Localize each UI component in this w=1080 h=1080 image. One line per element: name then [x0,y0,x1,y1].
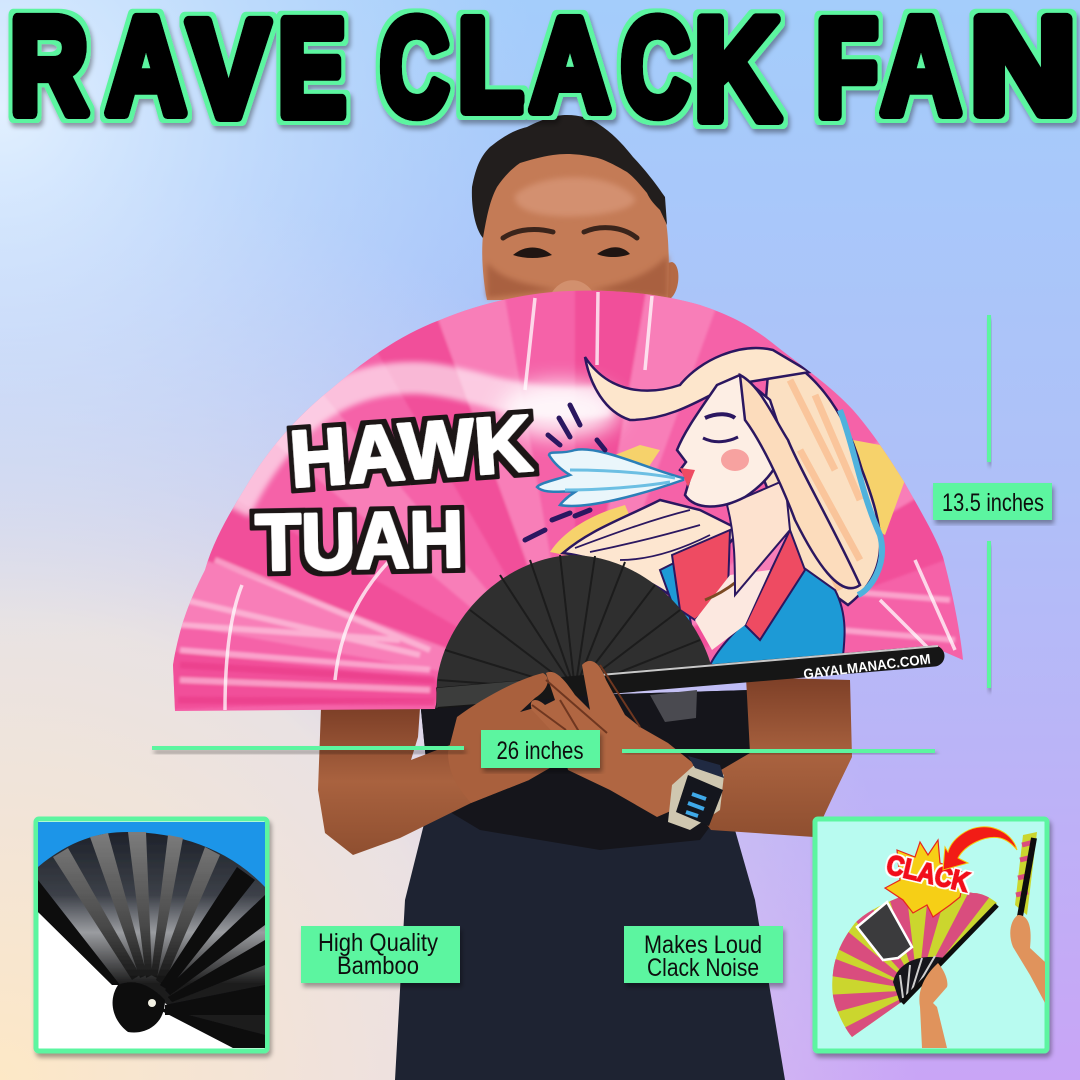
black slats [38,867,265,1048]
fabric ray wedges [150,275,970,710]
water spray [537,449,683,506]
neck [727,480,790,595]
label: clack noise: Clack Noise [647,954,759,982]
width label: 26 inches [496,737,584,765]
eyes [513,247,630,258]
small fan handle [902,905,997,1003]
nose [550,280,595,296]
label: clack noise [624,926,783,983]
height dimension line [987,315,991,688]
top under jacket [695,570,770,650]
jacket red [672,530,805,640]
side hair [740,375,860,588]
viewer-left hand [448,673,560,803]
fan word: TUAH: TUAH [255,494,464,587]
blue hair accent [840,410,882,595]
shirt chest shadow [420,690,752,850]
girl's back hair [764,374,880,607]
small fan ribs [893,957,945,1003]
CLACK word: CLACK [884,849,972,898]
face [482,140,669,300]
right arm [680,677,852,837]
cup graphic [857,902,912,960]
height label [933,483,1052,520]
forehead highlight [515,177,635,216]
flowing hair [563,500,740,595]
fan fabric [173,290,963,711]
finger lines [532,665,640,750]
textured slats [53,832,220,985]
ear [655,262,678,303]
panel: clack demo [815,819,1047,1051]
main title [10,0,1076,150]
fan rib disc [436,555,711,708]
blue fabric [38,822,265,890]
hair swoosh [585,348,810,420]
upper hand and arm [1010,915,1045,1003]
hands holding the handle [448,661,724,830]
peach hair streaks [790,380,860,590]
white wash [500,382,620,438]
shirt [395,690,785,1080]
small fan striped body [832,892,997,1037]
handle butt grey [437,680,530,707]
handle brand: GAYALMANAC.COM [802,650,931,682]
shirt pocket [650,690,697,722]
wave band [235,378,610,510]
burst [885,840,965,917]
closed fan stripes [1016,842,1034,895]
water droplets [525,405,605,540]
label: clack noise: Makes Loud [644,931,762,959]
yellow blobs [550,445,660,560]
pivot cap [113,982,165,1033]
fan gaps background [38,832,265,1048]
necklace [704,582,734,602]
eye and cheek [680,414,749,487]
person holding the fan [318,115,852,1080]
water shading [565,470,675,490]
closed fan [1015,832,1037,915]
handle rounded end [924,646,944,666]
white streaks [225,292,955,710]
label: bamboo [301,926,460,983]
main fan [173,290,963,711]
red arrow [943,827,1017,870]
left arm [318,708,529,855]
panel: bamboo close-up [36,819,267,1051]
hair [472,115,667,238]
face profile [677,375,785,507]
fan word: HAWK: HAWK [287,398,535,504]
width dimension line [152,746,935,753]
height label: 13.5 inches [942,489,1044,517]
label: bamboo: Bamboo [337,952,419,980]
lower hand and arm [919,963,947,1048]
handle highlight [600,646,938,675]
eyebrows [503,228,637,238]
viewer-right hand [531,661,696,817]
watch [668,756,724,830]
closed fan handle [1019,838,1034,922]
label: bamboo: High Quality [318,929,438,957]
flowing hair strands [575,510,710,560]
jacket blue [660,560,845,665]
width label [481,730,600,768]
pivot pin [148,999,156,1007]
small fan rib lines [900,956,935,998]
cheek shade [487,255,668,298]
fan handle [437,656,934,698]
